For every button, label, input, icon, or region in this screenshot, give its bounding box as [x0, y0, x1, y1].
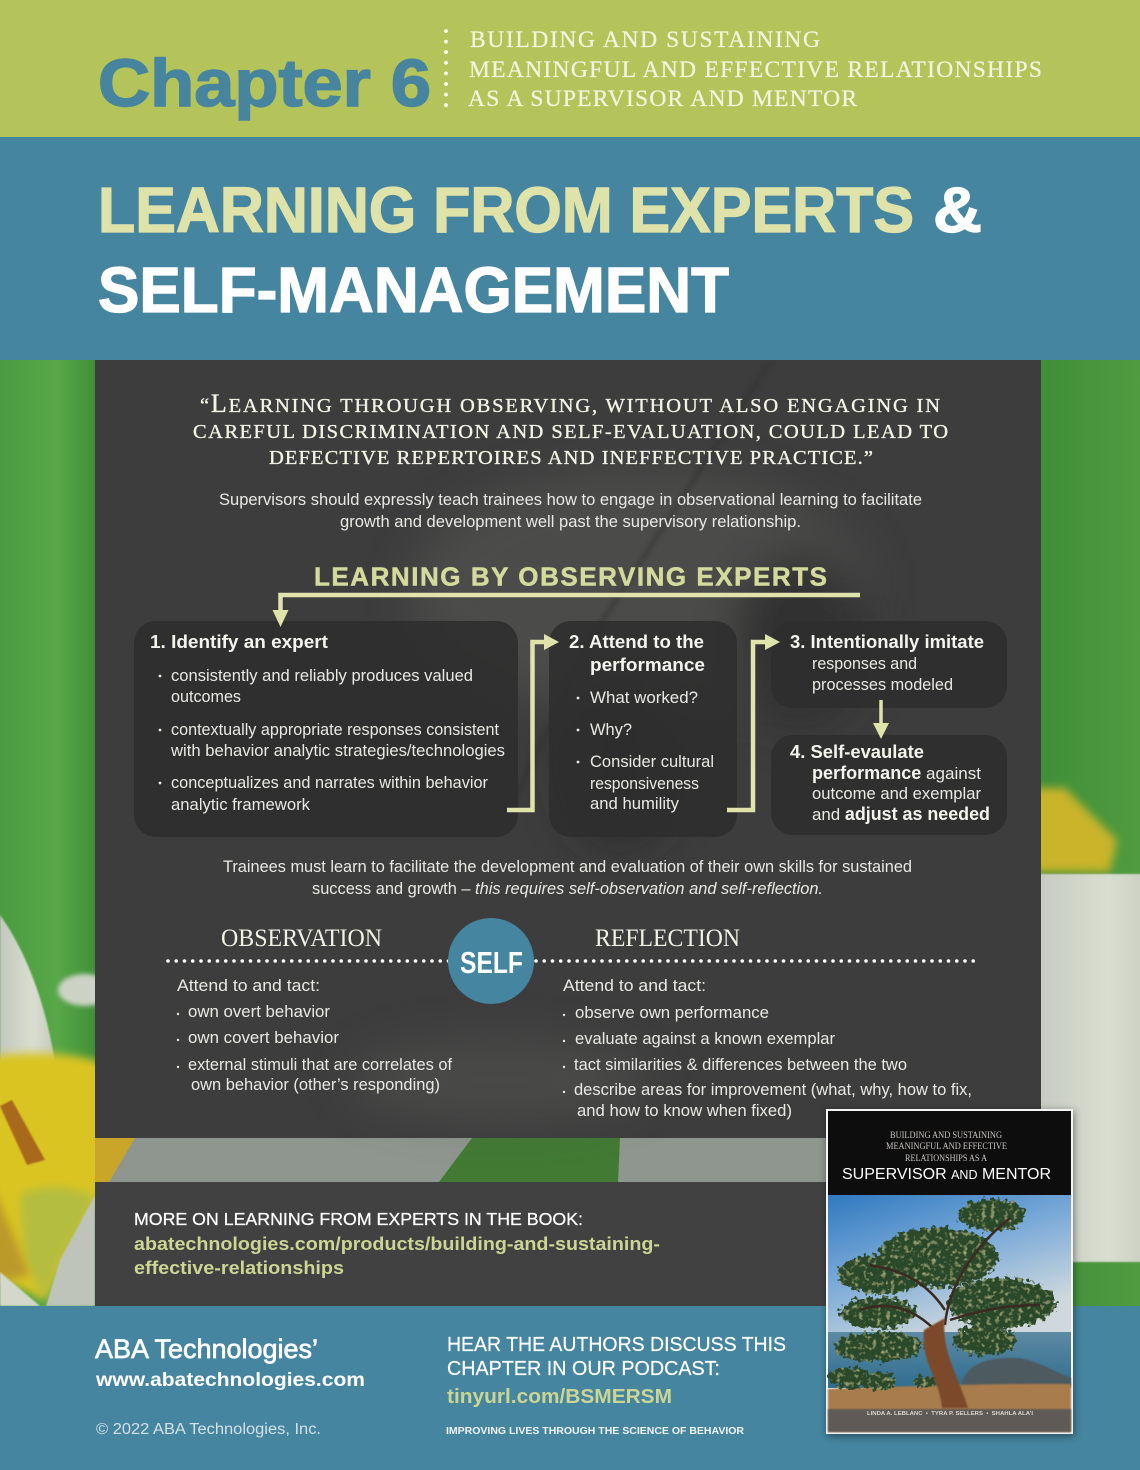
quote: CAREFUL DISCRIMINATION AND SELF-EVALUATION, COULD LEAD TO	[193, 421, 948, 443]
observation list: own behavior (other’s responding)	[191, 1075, 440, 1094]
panel: step 4: outcome and exemplar	[812, 784, 981, 803]
logo and website: ABA Technologies’	[95, 1334, 318, 1364]
closing text: Trainees must learn to facilitate the development and evaluation of their own skills for sustained	[223, 857, 912, 876]
panel: step 4: and adjust as needed	[812, 804, 990, 824]
quote	[193, 389, 948, 469]
panel: step 2: responsiveness	[590, 774, 699, 793]
book title block: RELATIONSHIPS AS A	[905, 1153, 987, 1163]
chapter title	[468, 27, 1042, 112]
title band	[0, 137, 1140, 360]
intro text	[219, 490, 922, 531]
panel: step 1	[134, 621, 518, 837]
panel: step 4: 4. Self-evaulate	[790, 742, 924, 762]
panel: step 2: What worked?	[590, 688, 698, 707]
book link text: abatechnologies.com/products/building-and-sustaining-	[134, 1234, 660, 1254]
self circle	[448, 918, 534, 1004]
left petal	[0, 915, 55, 1062]
panel: step 1: with behavior analytic strategies/technologies	[170, 741, 505, 760]
chapter title: MEANINGFUL AND EFFECTIVE RELATIONSHIPS	[469, 57, 1042, 83]
arrow: step 3 to step 4	[873, 700, 889, 739]
gap band	[95, 1138, 830, 1182]
book cover	[826, 1109, 1073, 1434]
quote: DEFECTIVE REPERTOIRES AND INEFFECTIVE PRACTICE.”	[269, 447, 873, 469]
chapter title: BUILDING AND SUSTAINING	[470, 27, 820, 53]
panel: step 2: Why?	[590, 720, 632, 739]
podcast text: CHAPTER IN OUR PODCAST:	[447, 1358, 720, 1380]
book title block: SUPERVISOR AND MENTOR	[842, 1166, 1051, 1183]
logo and website	[95, 1334, 365, 1391]
dark content panel	[95, 360, 1041, 1138]
panel: step 2: 2. Attend to the	[569, 632, 704, 652]
main title: LEARNING FROM EXPERTS	[98, 174, 914, 246]
arrow: step 1 to step 2	[507, 634, 559, 810]
intro text: Supervisors should expressly teach trainees how to engage in observational learning to facilitate	[219, 490, 922, 509]
panel: step 3: responses and	[812, 654, 917, 673]
reflection list: observe own performance	[575, 1003, 769, 1022]
reflection list: evaluate against a known exemplar	[575, 1029, 835, 1048]
book link text: effective-relationships	[134, 1258, 344, 1278]
yellow flower centre	[0, 1053, 140, 1306]
book photo: tree: LINDA A. LEBLANC • TYRA P. SELLERS • SHAHLA ALA’I	[867, 1411, 1034, 1417]
observation list: own covert behavior	[188, 1028, 339, 1047]
panel: step 3: processes modeled	[812, 675, 953, 694]
main title	[98, 174, 982, 326]
observation list: Attend to and tact:	[177, 976, 320, 995]
main title: SELF-MANAGEMENT	[98, 254, 729, 326]
book photo: tree	[828, 1195, 1071, 1432]
book link text	[134, 1209, 660, 1278]
header band	[0, 0, 1140, 137]
heading: observation: OBSERVATION	[221, 925, 382, 952]
main title: &	[933, 174, 982, 246]
panel: step 1: 1. Identify an expert	[150, 632, 328, 652]
left blob	[58, 974, 112, 1006]
panel: step 1: analytic framework	[171, 795, 310, 814]
podcast text: HEAR THE AUTHORS DISCUSS THIS	[447, 1334, 786, 1356]
reflection list	[563, 976, 972, 1120]
panel: step 1: consistently and reliably produces valued	[171, 666, 473, 685]
panel: step 2: performance	[590, 655, 705, 675]
reflection list: describe areas for improvement (what, why, how to fix,	[574, 1080, 972, 1099]
panel: step 1: outcomes	[171, 687, 241, 706]
right yellow blob	[1030, 788, 1117, 872]
observation list: external stimuli that are correlates of	[188, 1055, 452, 1074]
lower panel: book link background	[95, 1182, 835, 1306]
observation list: own overt behavior	[188, 1002, 330, 1021]
logo and website: www.abatechnologies.com	[95, 1370, 365, 1391]
intro text: growth and development well past the supervisory relationship.	[340, 512, 801, 531]
right petal	[1030, 874, 1140, 1262]
quote: “LEARNING THROUGH OBSERVING, WITHOUT ALSO ENGAGING IN	[200, 389, 940, 418]
heading: reflection: REFLECTION	[595, 925, 740, 952]
reflection list: Attend to and tact:	[563, 976, 706, 995]
section heading: LEARNING BY OBSERVING EXPERTS	[314, 562, 827, 592]
tagline: IMPROVING LIVES THROUGH THE SCIENCE OF BEHAVIOR	[446, 1425, 744, 1437]
dotted divider	[168, 959, 974, 963]
panel: step 1: contextually appropriate responses consistent	[171, 720, 499, 739]
chapter number heading: Chapter 6	[98, 46, 431, 121]
book title block: MEANINGFUL AND EFFECTIVE	[886, 1141, 1007, 1151]
panel: step 2: and humility	[590, 794, 679, 813]
footer band	[0, 1306, 1140, 1470]
chapter title: AS A SUPERVISOR AND MENTOR	[468, 86, 857, 112]
book link text: MORE ON LEARNING FROM EXPERTS IN THE BOOK:	[134, 1209, 583, 1229]
reflection list: tact similarities & differences between the two	[574, 1055, 907, 1074]
podcast text: tinyurl.com/BSMERSM	[447, 1385, 672, 1408]
panel: step 1: conceptualizes and narrates within behavior	[171, 773, 488, 792]
closing text: success and growth – this requires self-observation and self-reflection.	[312, 879, 823, 898]
copyright: © 2022 ABA Technologies, Inc.	[96, 1421, 321, 1438]
book title block	[828, 1111, 1071, 1195]
panel: step 4	[771, 735, 1007, 835]
panel: step 3	[771, 621, 1007, 708]
arrow: heading to step 1	[272, 595, 860, 627]
closing text	[223, 857, 912, 898]
panel: step 2	[549, 621, 737, 837]
self circle: SELF	[460, 945, 523, 980]
observation list	[177, 976, 452, 1094]
dotted vertical divider	[444, 31, 448, 106]
panel: step 2: Consider cultural	[590, 752, 714, 771]
book title block: BUILDING AND SUSTAINING	[890, 1130, 1002, 1140]
panel: step 3: 3. Intentionally imitate	[790, 632, 984, 652]
panel: step 4: performance against	[812, 763, 981, 783]
podcast text	[447, 1334, 786, 1408]
background photo: flower	[0, 360, 1140, 1310]
arrow: step 2 to step 3	[727, 634, 780, 810]
reflection list: and how to know when fixed)	[577, 1101, 792, 1120]
